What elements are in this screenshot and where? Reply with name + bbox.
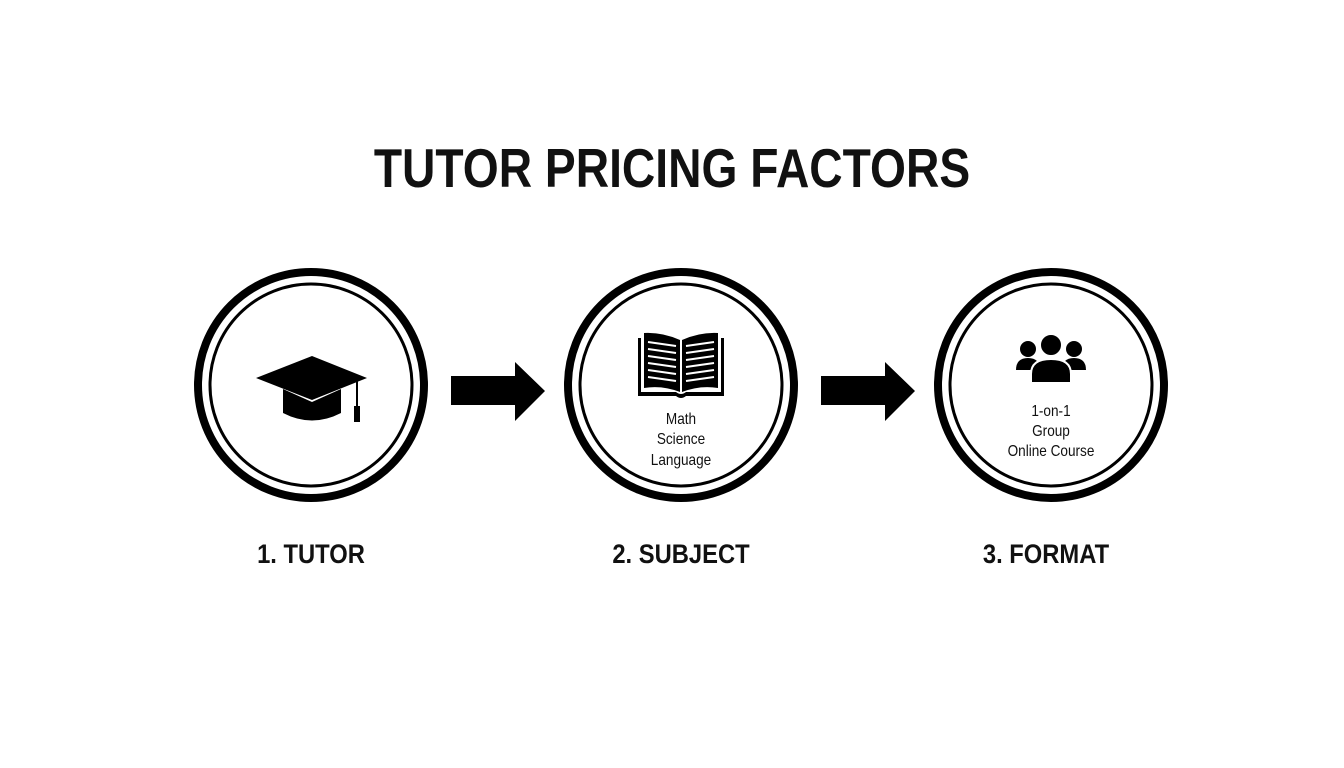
title: TUTOR PRICING FACTORS [374,137,970,199]
text: formats: 1-on-1 [1031,403,1071,420]
text: subjects [651,411,711,469]
panel: tutor [198,272,424,498]
arrow 2 [821,362,915,421]
icon: book [638,333,724,398]
text: formats: Online Course [1008,443,1094,460]
arrow 1 [451,362,545,421]
text: formats: Group [1032,423,1070,440]
text: formats [1008,403,1094,460]
panel: subject [568,272,794,498]
icon: graduation cap [256,356,367,422]
label 3: 3. FORMAT [983,539,1109,569]
label 1: 1. TUTOR [257,539,365,569]
label 2: 2. SUBJECT [612,539,750,569]
text: subjects: Math [666,411,696,428]
text: subjects: Language [651,452,711,469]
icon: people [1016,334,1086,383]
text: subjects: Science [657,431,705,448]
panel: format [938,272,1164,498]
